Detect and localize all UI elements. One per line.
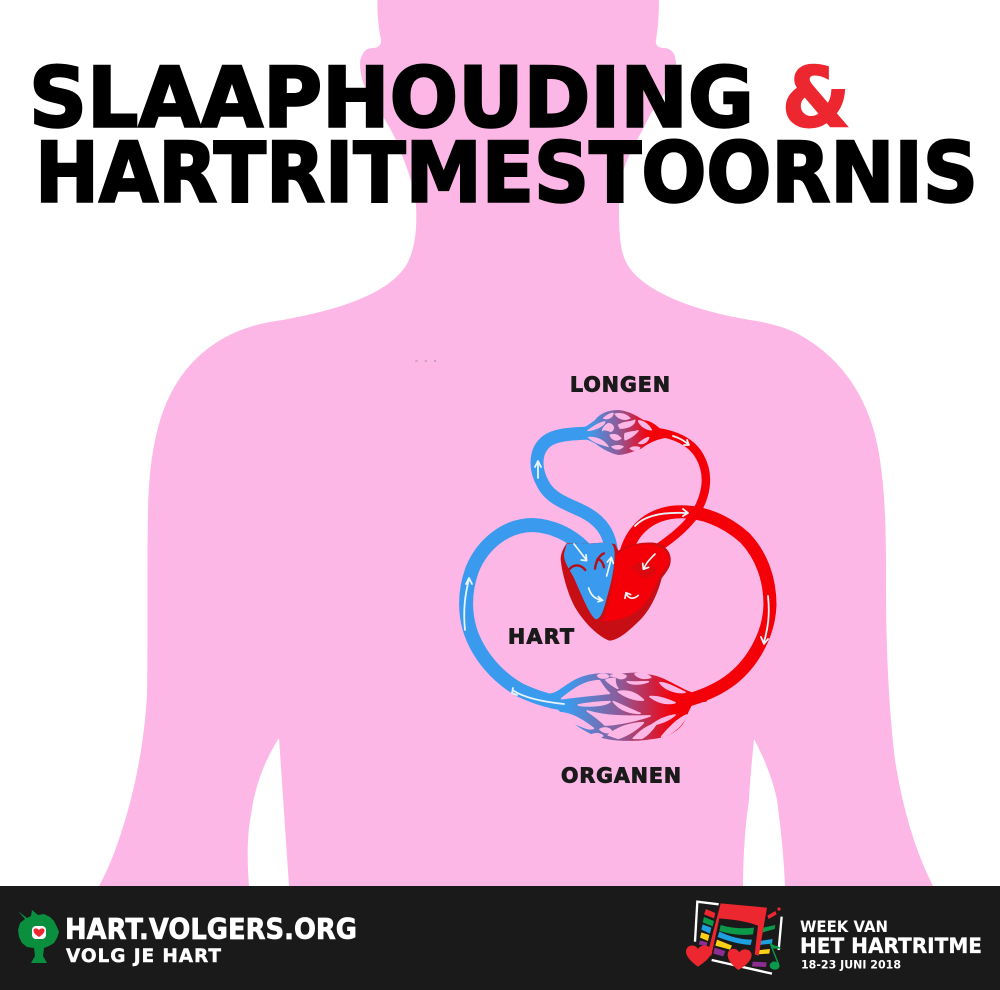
vessel: pulmonary vein [655, 432, 706, 550]
valves [569, 553, 604, 570]
label: lungs: LONGEN [570, 372, 670, 396]
heart arrows [574, 544, 655, 602]
left chambers, red [602, 544, 669, 621]
hearts [686, 945, 711, 967]
body silhouette [99, 0, 933, 886]
tagline: VOLG JE HART [66, 946, 221, 967]
circulation diagram [464, 410, 770, 741]
small green note [769, 943, 782, 970]
vessel: vena cava [466, 525, 584, 704]
heart shading [630, 562, 657, 579]
title line 1: SLAAPHOUDING [29, 50, 754, 146]
event line 1: WEEK VAN [800, 917, 888, 936]
vessel: pulmonary artery [537, 433, 612, 560]
capillaries: organs [550, 673, 710, 741]
stray marks: - - - [415, 357, 439, 365]
note body [707, 903, 767, 956]
event line 2: HET HARTRITME [800, 934, 982, 958]
icon: music note with hearts [686, 902, 782, 974]
icon: tree with heart [18, 910, 59, 963]
arrows on vessels [464, 436, 769, 704]
site name: HART.VOLGERS.ORG [65, 913, 357, 946]
title [29, 50, 978, 222]
capillaries: lungs [575, 410, 675, 455]
footer bar [0, 886, 1000, 990]
event dates: 18-23 JUNI 2018 [801, 958, 901, 972]
label: heart: HART [508, 624, 574, 648]
right chambers, blue [564, 543, 615, 619]
label: organs: ORGANEN [561, 764, 681, 788]
heart muscle [561, 542, 671, 641]
logo: hart.volgers [18, 910, 357, 967]
heart [561, 542, 671, 641]
vessel: aorta [624, 512, 770, 701]
title ampersand: & [782, 50, 850, 146]
logo: week van het hartritme [686, 902, 982, 974]
